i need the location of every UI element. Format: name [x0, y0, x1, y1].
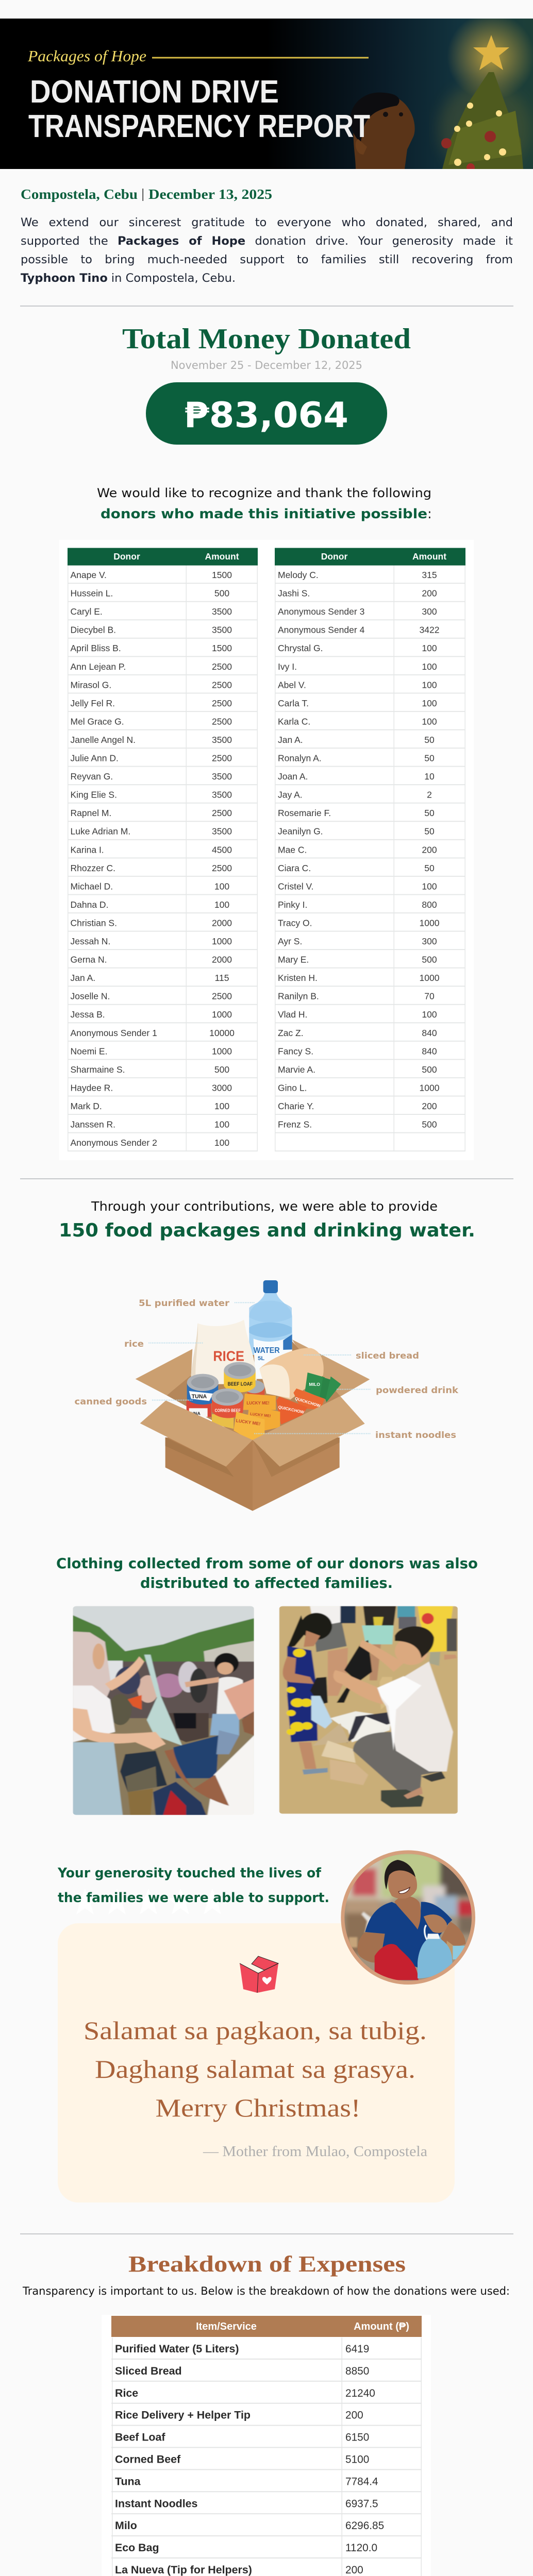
illustration: food package box — [135, 1280, 370, 1511]
thank-you text: : — [427, 506, 432, 522]
table: donors left: Janssen R. — [70, 1119, 115, 1129]
table: donors right: Jeanilyn G. — [278, 826, 323, 837]
decorative stars — [72, 1889, 225, 1914]
thank-you text — [97, 486, 432, 522]
quote text: Merry Christmas! — [156, 2093, 361, 2122]
date range: November 25 - December 12, 2025 — [171, 359, 362, 371]
panel: expenses table: 5100 — [345, 2453, 369, 2466]
logo script: Packages of Hope: Packages of Hope — [27, 47, 146, 65]
heading: breakdown of expenses: Breakdown of Expenses — [128, 2251, 406, 2277]
table: donors right — [275, 548, 465, 1151]
table: donors right: 500 — [422, 1064, 437, 1075]
header banner — [0, 13, 533, 175]
table: donors right: 300 — [422, 606, 437, 617]
table: donors right: 840 — [422, 1028, 437, 1038]
table: donors left: Jessa B. — [70, 1009, 105, 1020]
icon: milo sachets — [305, 1372, 341, 1402]
table: donors right: Karla C. — [278, 716, 310, 726]
table: donors left: Janelle Angel N. — [70, 735, 136, 745]
expenses intro: Transparency is important to us. Below is the breakdown of how the donations were used: — [22, 2285, 510, 2298]
table: donors left: April Bliss B. — [70, 643, 121, 653]
table: donors left: Anape V. — [70, 570, 107, 580]
cardboard box front — [140, 1396, 365, 1511]
panel: quote card — [58, 1923, 455, 2202]
table: donors right: Jay A. — [278, 790, 303, 800]
callout labels: sliced bread — [356, 1351, 419, 1361]
table: donors left: Luke Adrian M. — [70, 826, 130, 837]
table: donors left: 1000 — [212, 936, 232, 946]
table: donors right: 315 — [422, 570, 437, 580]
heading: total money donated: Total Money Donated — [122, 323, 411, 355]
table: donors right: Ivy I. — [278, 662, 297, 672]
table: donors right: Vlad H. — [278, 1009, 307, 1020]
table: donors right: 50 — [424, 753, 435, 764]
banner title — [29, 80, 370, 137]
dateline: Compostela, Cebu — [21, 187, 138, 202]
table: donors left: 2500 — [212, 753, 232, 764]
intro paragraph — [21, 216, 513, 285]
table: donors right: 500 — [422, 1119, 437, 1129]
callout labels: rice — [124, 1339, 144, 1349]
table: donors left: Jan A. — [70, 973, 95, 983]
table: donors left: 2000 — [212, 918, 232, 928]
dateline — [21, 187, 272, 202]
table: donors left: King Elie S. — [70, 790, 117, 800]
heading: generosity: Your generosity touched the lives of — [57, 1866, 322, 1881]
heading: clothing: Clothing collected from some of our donors was also — [56, 1555, 478, 1572]
heading: 150 food packages: Through your contributions, we were able to provide — [91, 1199, 438, 1214]
table: donors right: 1000 — [420, 1082, 440, 1093]
table: donors left: Donor — [113, 551, 140, 562]
intro paragraph: possible to bring much-needed support to families still recovering from — [21, 253, 513, 266]
table: donors right: 10 — [424, 771, 435, 782]
table: donors right: Abel V. — [278, 680, 306, 690]
table: donors left: Caryl E. — [70, 606, 103, 617]
icon: instant noodles boxes: LUCKY ME! — [246, 1401, 270, 1405]
table: donors right: Cristel V. — [278, 881, 313, 891]
icon: christmas tree with star — [438, 13, 533, 175]
panel: expenses table: 200 — [345, 2564, 363, 2576]
table: donors right: Jashi S. — [278, 588, 310, 599]
table: donors right: 1000 — [420, 918, 440, 928]
total amount pill: ₱83,064 — [184, 395, 348, 436]
box back and inside — [136, 1340, 370, 1443]
icon: canned goods: CORNED BEEF — [215, 1408, 241, 1413]
table: donors right: 100 — [422, 716, 437, 726]
icon: instant noodles boxes: QUICKCHOW — [294, 1396, 321, 1409]
panel: expenses table: 21240 — [345, 2387, 375, 2399]
table: donors left: 2500 — [212, 680, 232, 690]
table: donors right: Joan A. — [278, 771, 308, 782]
table: donors right: Marvie A. — [278, 1064, 315, 1075]
panel: expenses table: Rice Delivery + Helper Tip — [115, 2409, 251, 2421]
icon: canned goods: BEEF LOAF — [228, 1381, 253, 1387]
table: donors right: 200 — [422, 1101, 437, 1111]
table: donors right: Frenz S. — [278, 1119, 312, 1129]
table: donors left: Mark D. — [70, 1101, 102, 1111]
table: donors right: 200 — [422, 588, 437, 599]
table: donors right: Kristen H. — [278, 973, 318, 983]
banner title: TRANSPARENCY REPORT — [28, 109, 370, 144]
panel: expenses table: 6150 — [345, 2432, 369, 2444]
table: donors right: Rosemarie F. — [278, 808, 331, 818]
panel: expenses table: 200 — [345, 2410, 363, 2421]
table: donors left: 3500 — [212, 606, 232, 617]
table: donors left: 3000 — [212, 1082, 232, 1093]
icon: canned goods: UNA — [191, 1411, 201, 1416]
intro paragraph: We extend our sincerest gratitude to everyone who donated, shared, and — [21, 216, 513, 229]
table: donors right: Ayr S. — [278, 936, 302, 946]
icon: water bottle — [249, 1280, 292, 1379]
panel: expenses table: Amount (₱) — [354, 2321, 409, 2332]
table: donors left: Jessah N. — [70, 936, 110, 946]
table: donors right: 1000 — [420, 973, 440, 983]
table: donors right: 70 — [424, 991, 435, 1002]
panel: expenses table: 8850 — [345, 2365, 369, 2377]
table: donors right: 50 — [424, 826, 435, 837]
table: donors left: Karina I. — [70, 844, 104, 855]
panel: expenses table: Rice — [115, 2387, 138, 2399]
table: donors right: 50 — [424, 863, 435, 873]
table: donors left: 1000 — [212, 1046, 232, 1056]
quote text — [84, 2016, 427, 2122]
table: donors left: Haydee R. — [70, 1082, 113, 1093]
icon: instant noodles boxes — [234, 1388, 325, 1442]
table: donors right: 100 — [422, 698, 437, 708]
table: donors left: 2500 — [212, 698, 232, 708]
total amount pill — [146, 382, 387, 445]
table: donors left: Hussein L. — [70, 588, 113, 599]
table: donors left: 10000 — [209, 1028, 235, 1038]
table: donors right: Amount — [412, 551, 446, 562]
table: donors left: Amount — [205, 551, 239, 562]
panel: expenses table: 6419 — [345, 2343, 369, 2355]
panel: expenses table — [102, 2315, 431, 2576]
icon: instant noodles boxes: LUCKY ME! — [236, 1418, 261, 1427]
thank-you text: We would like to recognize and thank the following — [97, 486, 431, 500]
table: donors left: Jelly Fel R. — [70, 698, 115, 708]
banner title: DONATION DRIVE — [30, 74, 279, 110]
table: donors left: Rapnel M. — [70, 808, 111, 818]
table: donors left: 2500 — [212, 863, 232, 873]
table: donors left: Dahna D. — [70, 900, 108, 910]
table: donors right: 800 — [422, 900, 437, 910]
table: donors left: Gerna N. — [70, 955, 107, 965]
heading: clothing — [56, 1555, 478, 1591]
table: donors left — [68, 548, 258, 1151]
table: donors left: 500 — [214, 588, 229, 599]
panel: expenses table: 7784.4 — [345, 2476, 378, 2487]
photo: clothing distribution crowd — [73, 1606, 254, 1815]
panel: expenses table: Milo — [115, 2519, 137, 2532]
table: donors right: Anonymous Sender 4 — [278, 625, 365, 635]
panel: expenses table: Corned Beef — [115, 2453, 181, 2466]
table: donors right: 100 — [422, 881, 437, 891]
table: donors right: 50 — [424, 735, 435, 745]
panel: expenses table: Item/Service — [196, 2321, 257, 2332]
photo: smiling mother portrait — [341, 1850, 475, 1985]
table: donors right: Tracy O. — [278, 918, 312, 928]
table: donors right: Ciara C. — [278, 863, 311, 873]
table: donors right: 2 — [427, 790, 432, 800]
table: donors left: Michael D. — [70, 881, 113, 891]
icon: canned goods — [187, 1362, 264, 1429]
intro paragraph: supported the Packages of Hope donation drive. Your generosity made it — [21, 234, 513, 248]
table: donors left: 115 — [215, 973, 229, 983]
icon: water bottle: 5L — [258, 1355, 264, 1362]
heading: 150 food packages: 150 food packages and drinking water. — [59, 1220, 475, 1241]
table: donors right: Charie Y. — [278, 1101, 314, 1111]
table: donors left: 1500 — [212, 643, 232, 653]
panel: expenses table: La Nueva (Tip for Helpers) — [115, 2564, 252, 2576]
icon: instant noodles boxes: QUICKCHOW — [278, 1404, 305, 1415]
table: donors right: Fancy S. — [278, 1046, 313, 1056]
panel: expenses table: Beef Loaf — [115, 2431, 165, 2444]
icon: rice bag: RICE — [213, 1348, 244, 1364]
table: donors left: Anonymous Sender 2 — [70, 1138, 157, 1148]
callout labels: powdered drink — [376, 1385, 459, 1396]
panel: expenses table: 6937.5 — [345, 2498, 378, 2510]
table: donors left: 1500 — [212, 570, 232, 580]
table: donors right: Ranilyn B. — [278, 991, 319, 1002]
panel: expenses table: Sliced Bread — [115, 2365, 182, 2377]
table: donors right: Pinky I. — [278, 900, 307, 910]
table: donors left: Reyvan G. — [70, 771, 113, 782]
table: donors right: 100 — [422, 680, 437, 690]
table: donors left: 100 — [214, 1138, 229, 1148]
table: donors right: 500 — [422, 955, 437, 965]
table: donors left: 2000 — [212, 955, 232, 965]
table: donors left: 3500 — [212, 826, 232, 837]
quote text: Daghang salamat sa grasya. — [95, 2055, 415, 2083]
table: donors left: 2500 — [212, 662, 232, 672]
icon: rice bag — [191, 1320, 257, 1384]
quote text: Salamat sa pagkaon, sa tubig. — [84, 2016, 427, 2045]
table: donors left: 1000 — [212, 1009, 232, 1020]
icon: sliced bread — [259, 1348, 324, 1400]
table: donors right: 300 — [422, 936, 437, 946]
table: donors left: Mirasol G. — [70, 680, 111, 690]
icon: gift box with heart — [240, 1956, 278, 1993]
icon: canned goods: TUNA — [192, 1394, 207, 1400]
table: donors left: Joselle N. — [70, 991, 110, 1002]
table: donors right: 100 — [422, 643, 437, 653]
table: donors left: 2500 — [212, 716, 232, 726]
table: donors right: Zac Z. — [278, 1028, 304, 1038]
callout dotted lines — [148, 1302, 371, 1434]
intro paragraph: Typhoon Tino in Compostela, Cebu. — [21, 272, 236, 285]
table: donors left: Julie Ann D. — [70, 753, 119, 764]
table: donors left: Mel Grace G. — [70, 716, 124, 726]
table: donors left: 100 — [214, 881, 229, 891]
table: donors right: 840 — [422, 1046, 437, 1056]
callout labels: instant noodles — [375, 1430, 456, 1440]
table: donors left: Sharmaine S. — [70, 1064, 125, 1075]
quote attribution: — Mother from Mulao, Compostela — [203, 2144, 428, 2160]
table: donors right: Mae C. — [278, 844, 307, 855]
thank-you text: donors who made this initiative possible — [101, 506, 427, 522]
table: donors left: 3500 — [212, 790, 232, 800]
table: donors left: 500 — [214, 1064, 229, 1075]
table: donors right: Mary E. — [278, 955, 309, 965]
table: donors left: Diecybel B. — [70, 625, 116, 635]
photo: child looking up — [350, 92, 415, 169]
table: donors right: Jan A. — [278, 735, 303, 745]
callout labels: 5L purified water — [139, 1298, 230, 1309]
table: donors right: Carla T. — [278, 698, 309, 708]
table: donors right: Gino L. — [278, 1082, 307, 1093]
icon: water bottle: WATER — [254, 1346, 280, 1355]
heading: 150 food packages — [59, 1199, 475, 1241]
table: donors right: 3422 — [420, 625, 439, 635]
table: donors left: Ann Lejean P. — [70, 662, 126, 672]
callout labels — [74, 1298, 459, 1440]
table: donors left: Christian S. — [70, 918, 117, 928]
icon: instant noodles boxes: LUCKY ME! — [250, 1412, 271, 1418]
panel: expenses table: Tuna — [115, 2475, 141, 2487]
heading: clothing: distributed to affected families. — [140, 1575, 393, 1591]
table: donors left: 3500 — [212, 625, 232, 635]
photo: volunteer giving clothes to a child — [279, 1606, 458, 1814]
panel: expenses table: Eco Bag — [115, 2541, 159, 2554]
table: donors left: 2500 — [212, 991, 232, 1002]
table: donors right: 100 — [422, 662, 437, 672]
table: donors left: Rhozzer C. — [70, 863, 115, 873]
callout labels: canned goods — [74, 1397, 147, 1407]
table: donors left: 4500 — [212, 844, 232, 855]
table: donors left: Noemi E. — [70, 1046, 107, 1056]
table: donors left: 3500 — [212, 771, 232, 782]
table: donors right: 50 — [424, 808, 435, 818]
panel: expenses table: 6296.85 — [345, 2520, 384, 2532]
table: donors left: 100 — [214, 900, 229, 910]
table: donors right: 200 — [422, 844, 437, 855]
dateline: December 13, 2025 — [148, 187, 272, 202]
table: donors left: Anonymous Sender 1 — [70, 1028, 157, 1038]
heading: generosity — [57, 1866, 329, 1906]
panel: donor tables — [59, 540, 474, 1160]
table: donors right: Chrystal G. — [278, 643, 323, 653]
heading: generosity: the families we were able to support. — [58, 1890, 329, 1906]
table: donors right: Melody C. — [278, 570, 319, 580]
table: donors left: 100 — [214, 1119, 229, 1129]
panel: expenses table: Instant Noodles — [115, 2497, 198, 2510]
panel: expenses table: Purified Water (5 Liters) — [115, 2343, 239, 2355]
table: donors left: 2500 — [212, 808, 232, 818]
table: donors right: 100 — [422, 1009, 437, 1020]
table: donors right: Anonymous Sender 3 — [278, 606, 364, 617]
panel: expenses table: 1120.0 — [345, 2542, 377, 2554]
icon: milo sachets: MILO — [309, 1382, 320, 1387]
table: donors right: Ronalyn A. — [278, 753, 322, 764]
table: donors left: 100 — [214, 1101, 229, 1111]
table: donors left: 3500 — [212, 735, 232, 745]
table: donors right: Donor — [321, 551, 347, 562]
